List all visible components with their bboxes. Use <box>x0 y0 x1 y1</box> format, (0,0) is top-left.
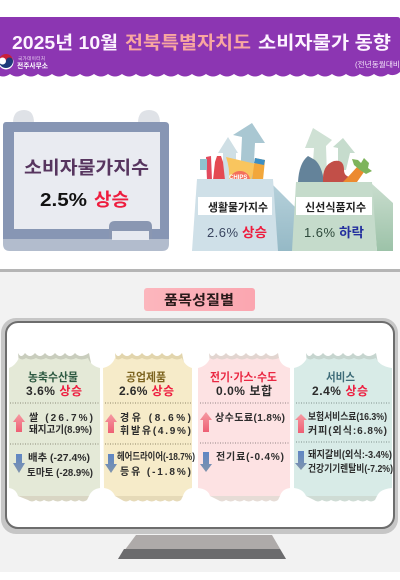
down items: 등유 (-1.8%) <box>120 466 191 478</box>
value: 2.4% 상승: 2.4% 상승 <box>312 384 368 398</box>
title: 2025년 10월 <box>12 33 118 53</box>
title: 소비자물가 동향 <box>258 33 391 53</box>
header banner <box>0 17 400 76</box>
value: 1.6% 하락: 1.6% <box>304 225 335 240</box>
title <box>12 33 391 53</box>
panel: 생활물가지수 box <box>192 123 295 251</box>
value: 1.6% 하락: 하락 <box>339 225 364 240</box>
value: 2.5% 상승: 상승 <box>94 190 129 210</box>
down arrow <box>13 454 25 473</box>
icon: rising arrows <box>218 123 265 180</box>
panel: consumer price index board <box>3 110 169 251</box>
panel: 서비스 card <box>294 353 393 502</box>
up item: 상수도료(1.8%) <box>215 411 285 424</box>
down item: 전기료(-0.4%) <box>216 450 284 463</box>
panel: 농축수산물 card <box>9 353 100 502</box>
heading: 공업제품: 공업제품 <box>126 370 166 384</box>
down items: 헤어드라이어(-18.7%) <box>117 450 195 463</box>
up items <box>29 411 93 436</box>
label: 신선식품지수: 신선식품지수 <box>305 201 366 214</box>
up items: 돼지고기(8.9%) <box>29 423 92 436</box>
down arrow <box>295 451 307 470</box>
label: 생활물가지수: 생활물가지수 <box>208 200 268 214</box>
up items: 보험서비스료(16.3%) <box>308 410 387 423</box>
value: 0.0% 보합: 0.0% 보합 <box>216 383 272 398</box>
value: 1.6% 하락 <box>304 225 364 240</box>
value: 2.5% 상승 <box>40 190 129 210</box>
monitor stand <box>118 535 286 559</box>
down arrow <box>200 452 212 472</box>
down items: 토마토 (-28.9%) <box>27 466 93 479</box>
panel: 신선식품지수 box <box>292 128 393 251</box>
value: 2.5% 상승: 2.5% <box>40 190 87 210</box>
logo: 국가데이터처 전주사무소 <box>0 54 49 70</box>
down items: 배추 (-27.4%) <box>28 451 90 464</box>
up items: 커피(외식:6.8%) <box>308 425 387 437</box>
panel: 공업제품 card <box>103 353 195 502</box>
down items <box>117 450 195 478</box>
title: 전북특별자치도 <box>125 33 251 53</box>
value: 2.6% 상승: 상승 <box>242 225 267 240</box>
logo: 국가데이터처 전주사무소: 국가데이터처 <box>18 55 45 62</box>
heading pill: 품목성질별: 품목성질별 <box>164 292 234 308</box>
icon: fish and vegetables <box>298 156 372 182</box>
icon: rising arrows <box>305 128 355 176</box>
up items: 쌀 (26.7%) <box>29 411 93 424</box>
heading: 서비스: 서비스 <box>326 371 355 384</box>
up items <box>308 410 387 437</box>
up arrow <box>295 414 307 433</box>
down items <box>27 451 93 479</box>
heading: 전기·가스·수도: 전기·가스·수도 <box>210 370 277 384</box>
value: 2.6% 상승: 2.6% 상승 <box>119 384 174 398</box>
heading: 농축수산물: 농축수산물 <box>28 370 78 384</box>
page background lower section <box>0 272 400 572</box>
panel: 전기·가스·수도 card <box>198 353 290 502</box>
value: 2.6% 상승 <box>207 225 267 240</box>
up arrow <box>105 414 117 433</box>
down items <box>308 448 393 475</box>
icon: toiletries and chips: CHIPS <box>229 175 247 181</box>
down items: 돼지갈비(외식:-3.4%) <box>308 448 392 461</box>
down arrow <box>105 454 117 473</box>
up items <box>120 412 191 437</box>
up arrow <box>200 412 212 432</box>
up items: 휘발유(4.9%) <box>120 424 191 437</box>
up items: 경유 (8.6%) <box>120 412 191 424</box>
value: 2.6% 상승: 2.6% <box>207 225 238 240</box>
monitor frame <box>1 318 398 534</box>
logo: 국가데이터처 전주사무소: 전주사무소 <box>17 61 49 70</box>
note: 전년동월대비: (전년동월대비 <box>355 59 400 69</box>
heading: 소비자물가지수: 소비자물가지수 <box>24 158 149 178</box>
up arrow <box>13 414 25 432</box>
heading pill: 품목성질별 <box>144 288 255 311</box>
value: 3.6% 상승: 3.6% 상승 <box>26 384 82 398</box>
